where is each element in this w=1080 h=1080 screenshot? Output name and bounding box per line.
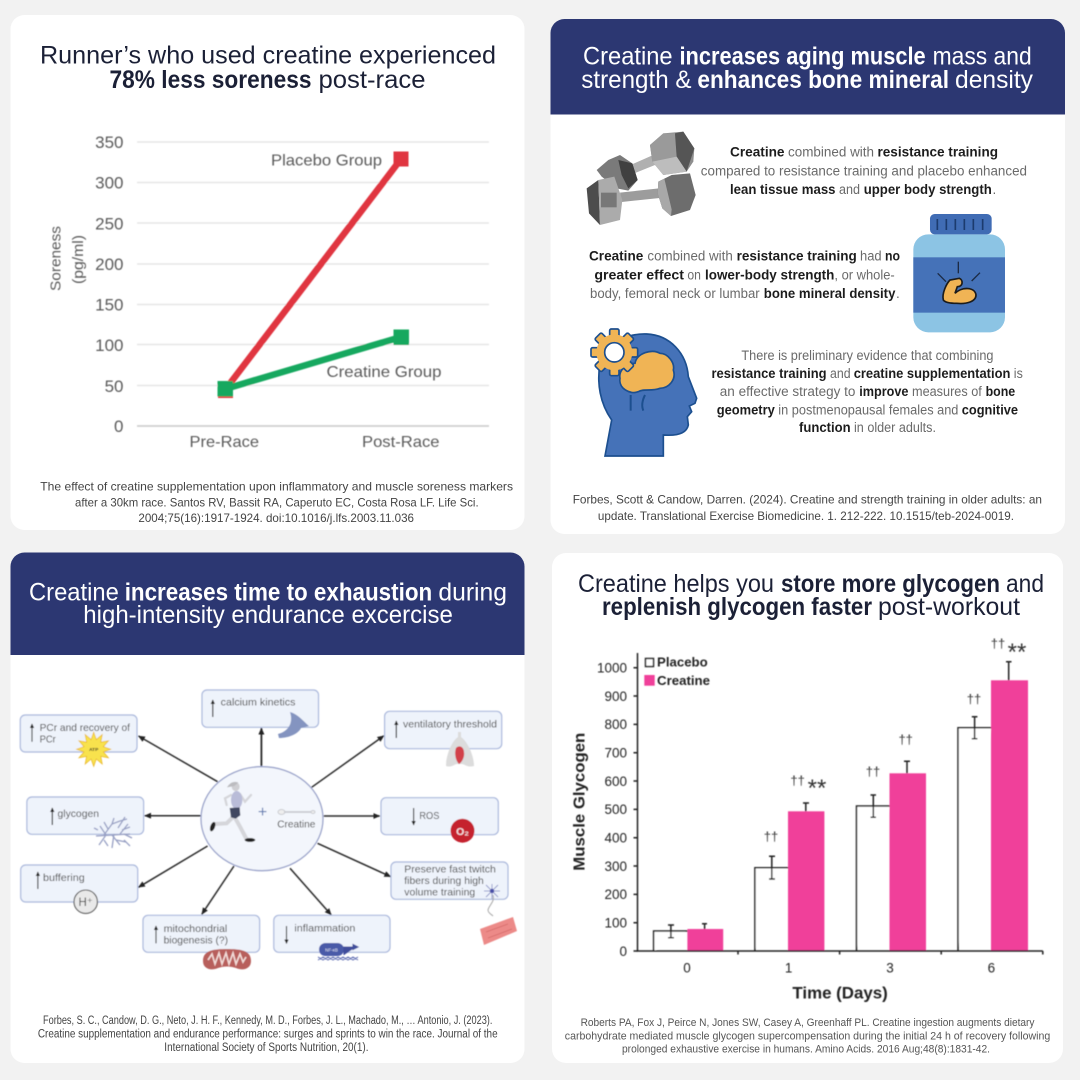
- citation: Santos: after a 30km race. Santos RV, Bassit RA, Caperuto EC, Costa Rosa LF. Life Sci.: [75, 495, 479, 509]
- significance marks: ††: [764, 829, 778, 844]
- citation: Forbes 2023: International Society of Sports Nutrition, 20(1).: [164, 1042, 368, 1054]
- panel: glycogen: [552, 553, 1063, 1063]
- panel: time to exhaustion: [10, 552, 524, 1063]
- icon: dumbbells: [587, 132, 696, 225]
- box: PCr: [20, 715, 137, 766]
- box: inflammation: inflammation: [294, 923, 356, 935]
- legend: Placebo: [657, 655, 708, 670]
- box: fast twitch fibers: volume training: [404, 887, 475, 899]
- box: glycogen: [27, 797, 144, 848]
- line chart: soreness: (pg/ml): [70, 235, 87, 284]
- error bars: [668, 662, 1012, 938]
- axis labels: Time (Days): [792, 983, 888, 1002]
- text block: lean tissue: lean tissue mass: [730, 182, 836, 197]
- significance marks: [764, 636, 1026, 844]
- text block: preliminary evidence: is: [1014, 366, 1023, 381]
- citation: Forbes 2024: [573, 492, 1042, 523]
- box: PCr: PCr: [40, 734, 56, 746]
- axis labels: 500: [604, 802, 627, 817]
- heading: aging muscle: strength &: [581, 66, 692, 94]
- text block: no greater effect: on: [687, 268, 701, 283]
- bars: placebo: [654, 728, 991, 951]
- panel: runner soreness: [10, 15, 524, 530]
- line chart: soreness: 200: [95, 255, 124, 274]
- citation: Forbes 2023: Creatine supplementation and endurance performance: surges and sprints to win the race. Journal of the: [38, 1028, 498, 1040]
- box: glycogen: glycogen: [58, 808, 99, 820]
- axis labels: 900: [604, 689, 627, 704]
- heading: soreness: 78% less soreness: [110, 66, 312, 94]
- heading: aging muscle: density: [955, 66, 1033, 94]
- text block: no greater effect: lower-body strength: [705, 268, 834, 283]
- line chart: soreness: 50: [105, 377, 124, 396]
- text block: preliminary evidence: cognitive: [962, 402, 1018, 417]
- text block: preliminary evidence: bone: [986, 384, 1016, 399]
- text block: lean tissue: resistance training: [878, 145, 998, 160]
- heading: aging muscle: mass and: [933, 43, 1032, 71]
- line chart: soreness: 100: [95, 336, 124, 355]
- significance marks: ††: [967, 692, 981, 706]
- panel: aging muscle: [550, 19, 1065, 534]
- text block: preliminary evidence: geometry: [717, 402, 775, 417]
- significance marks: ††: [790, 773, 805, 788]
- text block: lean tissue: combined with: [788, 145, 874, 160]
- axis labels: 700: [604, 746, 627, 760]
- text block: lean tissue: compared to resistance training and placebo enhanced: [701, 164, 1027, 179]
- line chart: soreness: Post-Race: [362, 434, 440, 451]
- text block: preliminary evidence: function: [799, 420, 851, 435]
- text block: no greater effect: .: [896, 286, 900, 301]
- text block: lean tissue: .: [992, 182, 996, 197]
- heading: time to exhaustion: Creatine: [29, 578, 119, 606]
- box: ROS: ROS: [419, 810, 439, 822]
- box: buffering: [21, 865, 138, 913]
- axis labels: 1000: [597, 660, 627, 676]
- text block: preliminary evidence: creatine supplementation: [854, 366, 1010, 381]
- axis labels: 3: [886, 961, 894, 976]
- text block: lean tissue: and: [839, 182, 860, 197]
- heading: soreness: Runner’s who used creatine experienced: [40, 42, 496, 70]
- citation: Santos: 2004;75(16):1917-1924. doi:10.1016/j.lfs.2003.11.036: [138, 511, 414, 525]
- bars: creatine: [687, 680, 1028, 951]
- heading: glycogen: store more glycogen: [781, 570, 1000, 598]
- line chart: soreness: 0: [114, 417, 124, 436]
- box: calcium kinetics: calcium kinetics: [221, 697, 296, 709]
- significance marks: **: [808, 775, 826, 802]
- citation: Santos: [40, 480, 513, 525]
- text block: preliminary evidence: and: [830, 366, 851, 381]
- text block: preliminary evidence: an effective strategy to: [720, 384, 855, 399]
- text block: no greater effect: bone mineral density: [764, 286, 896, 301]
- axis labels: Muscle Glycogen: [572, 733, 588, 871]
- axis labels: 0: [619, 944, 627, 959]
- axis labels: 300: [604, 859, 627, 874]
- axis labels: 800: [604, 717, 627, 732]
- icon: runner: [209, 782, 255, 842]
- text block: lean tissue: [701, 145, 1027, 197]
- box: PCr: ATP: [89, 747, 99, 753]
- icon: head with gear and brain: [591, 329, 697, 456]
- axis labels: [572, 660, 995, 1002]
- citation: Roberts: [565, 1017, 1050, 1056]
- box: fast twitch fibers: [391, 862, 517, 945]
- citation: Santos: The effect of creatine supplementation upon inflammatory and muscle soreness markers: [40, 480, 513, 494]
- citation: Forbes 2024: update. Translational Exercise Biomedicine. 1. 212-222. 10.1515/teb-2024-0019.: [598, 509, 1014, 523]
- line chart: soreness: [48, 133, 489, 451]
- line chart: soreness: 300: [95, 174, 124, 192]
- bar chart: muscle glycogen: [572, 636, 1043, 1002]
- heading: time to exhaustion: during: [438, 578, 507, 606]
- header band: time to exhaustion: [10, 552, 524, 655]
- text block: no greater effect: had: [860, 249, 882, 264]
- axis labels: 400: [604, 830, 627, 846]
- text block: preliminary evidence: in older adults.: [854, 420, 936, 435]
- heading: soreness: [40, 42, 496, 94]
- box: mitochondrial biogenesis: [143, 915, 260, 969]
- citation: Roberts: Roberts PA, Fox J, Peirce N, Jones SW, Casey A, Greenhaff PL. Creatine ingestion augments dietary: [581, 1017, 1035, 1029]
- heading: aging muscle: enhances bone mineral: [697, 66, 949, 94]
- heading: time to exhaustion: [29, 578, 507, 629]
- line chart: soreness: Pre-Race: [190, 434, 259, 451]
- significance marks: ††: [898, 732, 913, 747]
- box: buffering: buffering: [43, 872, 85, 884]
- text block: preliminary evidence: in postmenopausal females and: [778, 402, 958, 417]
- line chart: soreness: Creatine Group: [326, 364, 442, 381]
- central circle: runner plus creatine: [201, 767, 323, 871]
- axis labels: 0: [683, 961, 691, 976]
- citation: Roberts: prolonged exhaustive exercise in humans. Amino Acids. 2016 Aug;48(8):1831-42.: [622, 1044, 990, 1056]
- line chart: soreness: Placebo Group: [271, 152, 382, 170]
- heading: aging muscle: increases aging muscle: [680, 43, 926, 71]
- line chart: soreness: Soreness: [48, 226, 64, 291]
- box: calcium kinetics: [202, 690, 318, 738]
- heading: glycogen: and: [1006, 570, 1044, 598]
- axis labels: 6: [988, 961, 995, 976]
- text block: preliminary evidence: improve: [859, 384, 909, 399]
- heading: glycogen: replenish glycogen faster: [602, 593, 872, 621]
- line chart: soreness: 350: [95, 133, 124, 152]
- significance marks: ††: [991, 636, 1005, 651]
- heading: glycogen: [578, 570, 1044, 621]
- icon: scoop: [278, 810, 315, 814]
- arrows: from circle to boxes: [138, 728, 391, 915]
- axis labels: 1: [785, 961, 792, 976]
- axis labels: 600: [604, 774, 627, 789]
- box: mitochondrial biogenesis: mitochondrial: [164, 923, 227, 935]
- box: mitochondrial biogenesis: biogenesis (?): [164, 935, 228, 947]
- line chart: soreness: 250: [95, 214, 124, 234]
- box: buffering: H⁺: [79, 897, 93, 909]
- text block: preliminary evidence: [712, 348, 1023, 435]
- heading: aging muscle: Creatine: [583, 43, 673, 71]
- legend: [644, 655, 710, 688]
- box: fast twitch fibers: Preserve fast twitch: [404, 863, 496, 875]
- text block: no greater effect: body, femoral neck or lumbar: [590, 286, 760, 301]
- text block: lean tissue: Creatine: [730, 145, 785, 160]
- box: ROS: [381, 798, 498, 843]
- text block: no greater effect: Creatine: [589, 249, 644, 264]
- citation: Forbes 2023: Forbes, S. C., Candow, D. G., Neto, J. H. F., Kennedy, M. D., Forbes, J. L., Machado, M., … Antonio, J. (2023).: [43, 1015, 492, 1027]
- text block: preliminary evidence: resistance training: [712, 366, 826, 381]
- text block: preliminary evidence: There is preliminary evidence that combining: [741, 348, 994, 363]
- citation: Roberts: carbohydrate mediated muscle glycogen supercompensation during the initial 24 h of recovery following: [565, 1030, 1050, 1042]
- text block: no greater effect: , or whole-: [834, 268, 895, 283]
- text block: preliminary evidence: measures of: [912, 384, 982, 399]
- significance marks: **: [1008, 639, 1026, 666]
- text block: no greater effect: resistance training: [737, 249, 857, 264]
- box: ROS: O₂: [456, 826, 469, 838]
- text block: no greater effect: [589, 249, 900, 301]
- icon: supplement bottle: [913, 214, 1005, 332]
- axis labels: 100: [604, 916, 627, 930]
- box: PCr: PCr and recovery of: [40, 722, 130, 734]
- label: creatine: Creatine: [277, 818, 316, 830]
- line chart: soreness: 150: [95, 296, 124, 314]
- heading: glycogen: post-workout: [878, 593, 1020, 621]
- header band: aging muscle: [550, 19, 1065, 114]
- heading: soreness: post-race: [318, 66, 426, 94]
- heading: aging muscle: [581, 43, 1033, 94]
- heading: time to exhaustion: high-intensity endurance excercise: [83, 601, 453, 629]
- box: ventilatory threshold: [385, 711, 502, 767]
- box: inflammation: NF-κB: [325, 948, 338, 952]
- box: fast twitch fibers: fibers during high: [404, 875, 484, 887]
- plus sign: +: [258, 804, 267, 821]
- text block: no greater effect: combined with: [647, 249, 733, 264]
- citation: Forbes 2024: Forbes, Scott & Candow, Darren. (2024). Creatine and strength training in older adults: an: [573, 492, 1042, 506]
- text block: no greater effect: greater effect: [594, 268, 685, 283]
- text block: lean tissue: upper body strength: [864, 182, 992, 197]
- diagram: creatine mechanisms: [20, 690, 517, 969]
- heading: glycogen: Creatine helps you: [578, 570, 774, 598]
- axis labels: 200: [604, 887, 627, 902]
- axes: [634, 653, 1043, 954]
- box: ventilatory threshold: ventilatory threshold: [403, 718, 497, 730]
- significance marks: ††: [866, 764, 880, 779]
- box: inflammation: [274, 915, 390, 960]
- citation: Forbes 2023: [38, 1015, 498, 1054]
- heading: time to exhaustion: increases time to exhaustion: [125, 578, 432, 606]
- legend: Creatine: [657, 673, 710, 688]
- text block: no greater effect: no: [885, 249, 900, 264]
